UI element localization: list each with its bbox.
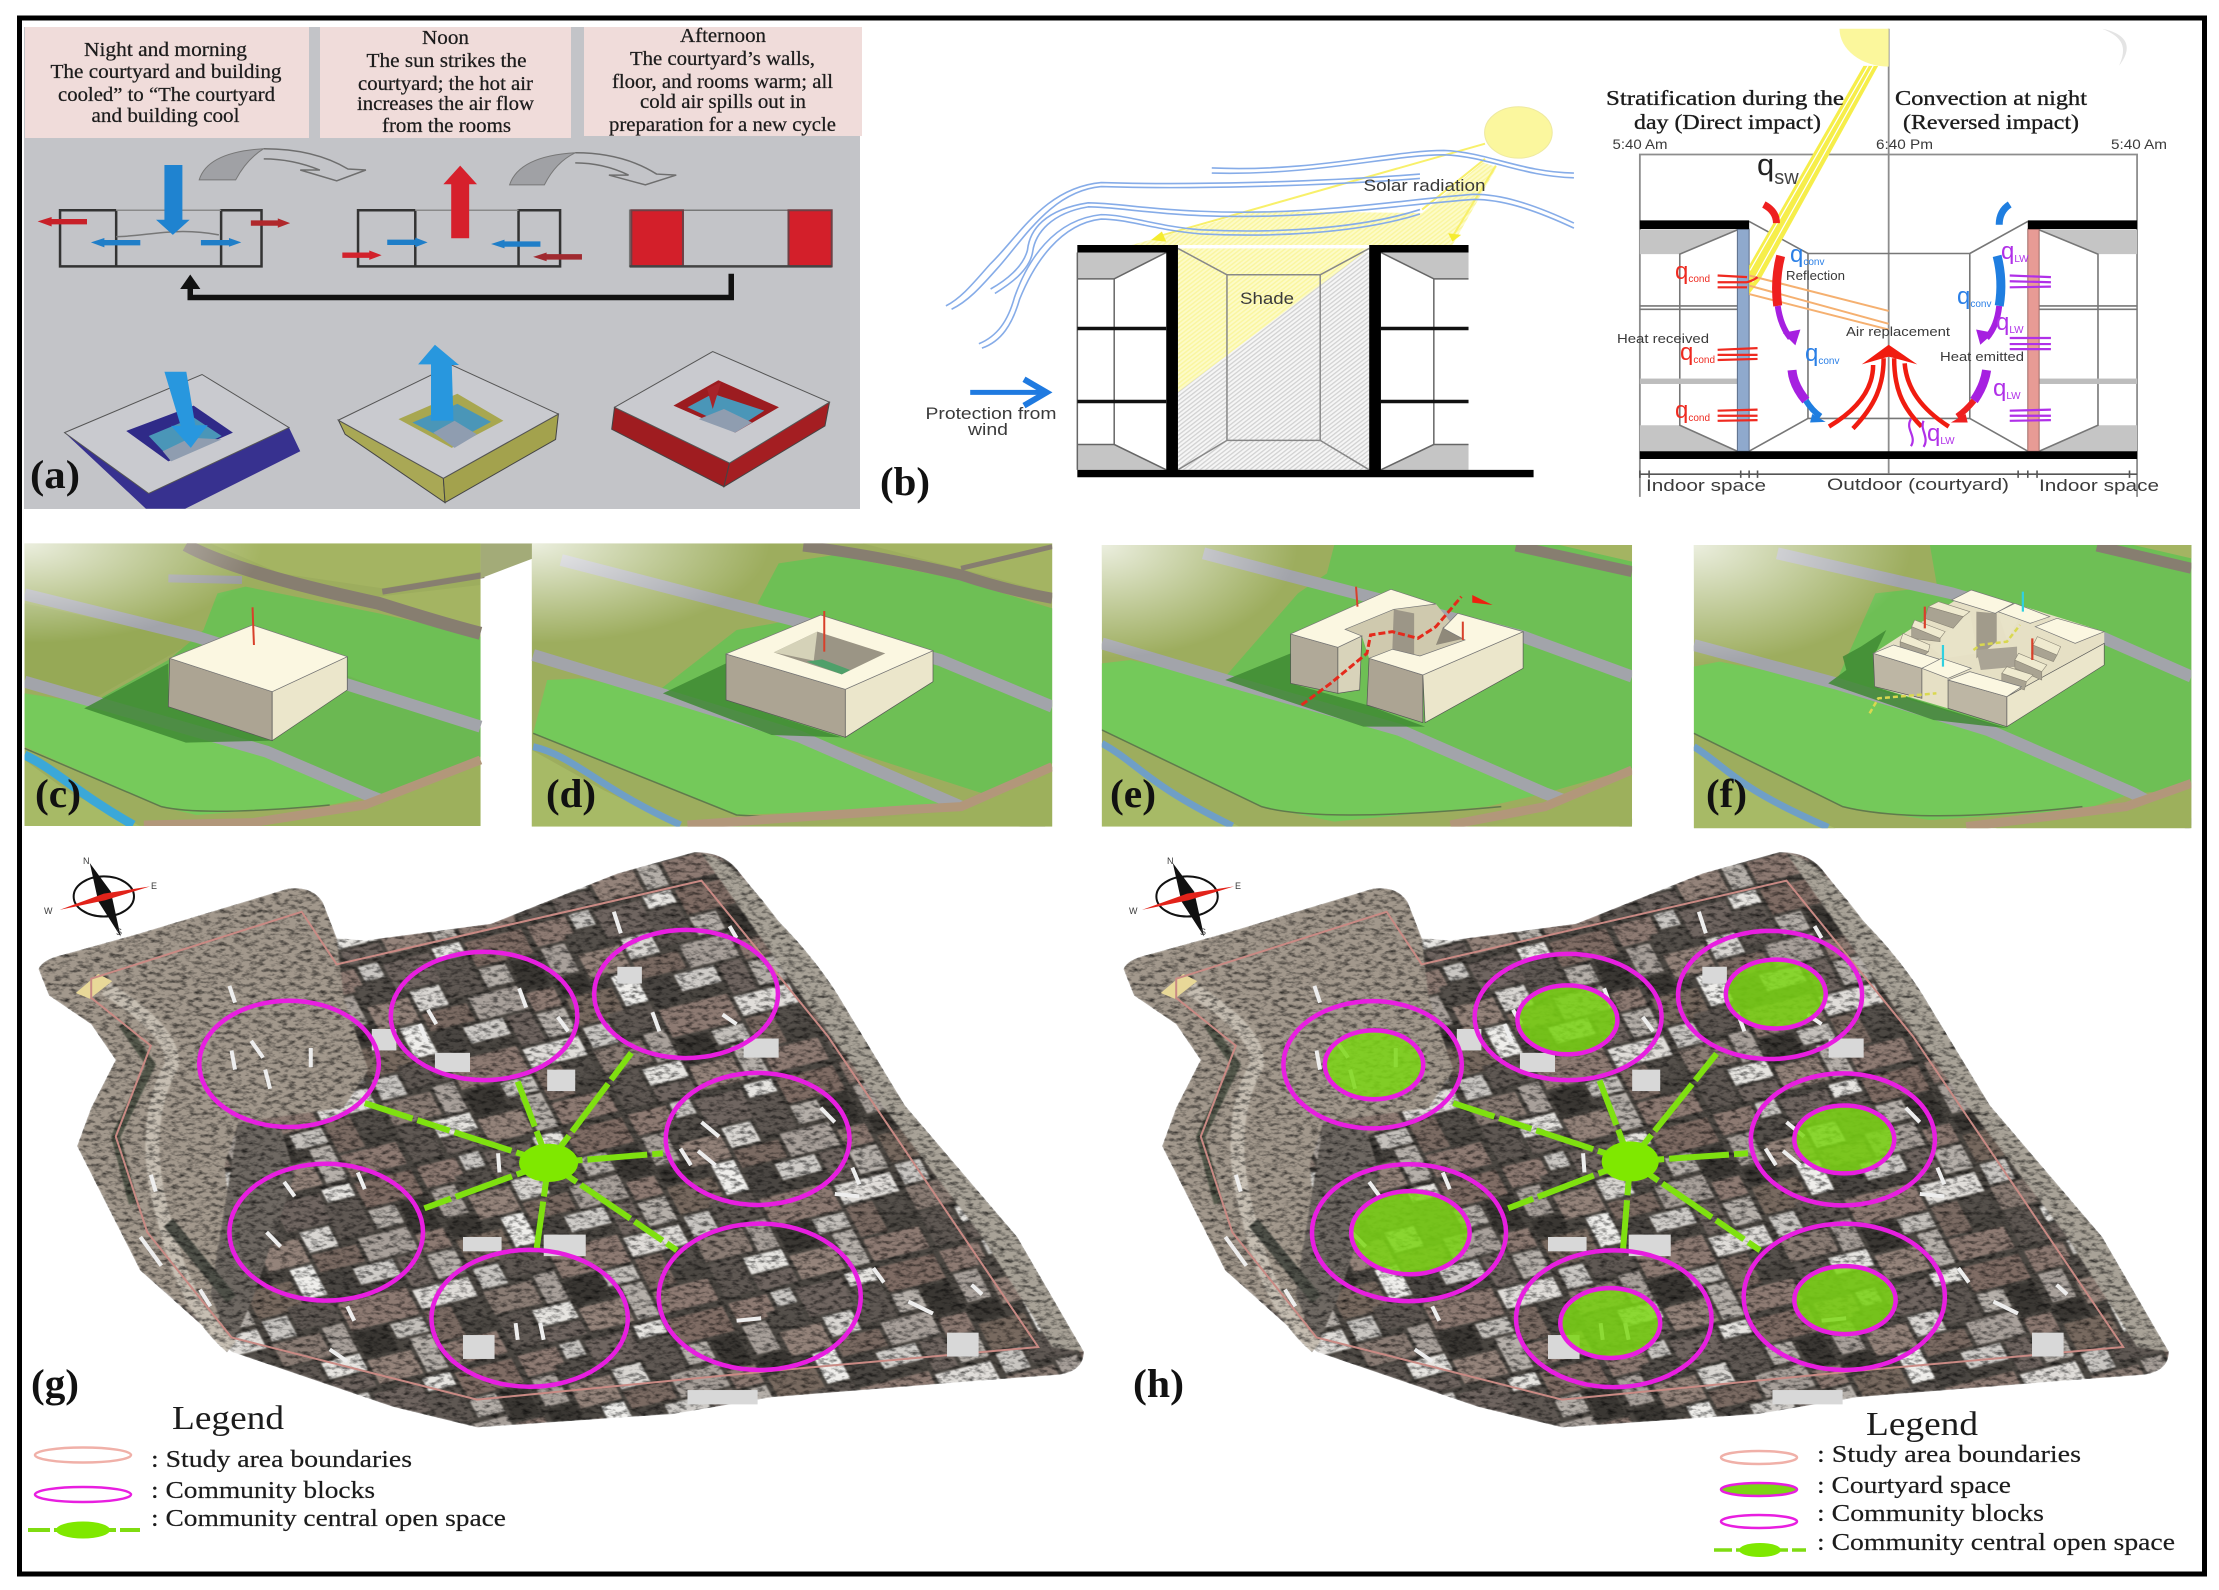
schematic: noon	[342, 166, 582, 266]
icon: compass	[1142, 863, 1234, 937]
block: noon, olive	[338, 345, 558, 503]
text: shade: Shade	[1240, 289, 1294, 308]
label d: (d)	[546, 771, 596, 816]
reflection lines	[1749, 275, 1889, 330]
map g: community blocks	[28, 852, 1084, 1538]
legend h: : Community central open space	[1817, 1530, 2175, 1556]
compass letters	[44, 856, 157, 937]
diagram annotations	[1617, 269, 2024, 364]
red air path	[1302, 587, 1493, 705]
courtyard spaces	[1325, 960, 1896, 1358]
space labels	[1646, 475, 2159, 495]
legend h: : Community blocks	[1817, 1501, 2044, 1527]
solar beam	[1749, 66, 1878, 294]
label h: (h)	[1133, 1361, 1184, 1406]
text: protection from wind: wind	[967, 420, 1008, 439]
compass letters: E	[151, 881, 157, 891]
heading: stratification	[1606, 86, 1844, 134]
compass letters	[1129, 856, 1241, 937]
caption: night and morning: The courtyard and building	[50, 62, 282, 83]
text: protection from wind: Protection from	[926, 404, 1056, 423]
label f: (f)	[1706, 771, 1747, 816]
heading: convection: Convection at night	[1895, 86, 2087, 110]
panel e: open-sided courtyard massing	[1102, 545, 1632, 827]
central open space network	[1453, 1053, 1760, 1250]
flux labels: convection: conv	[1803, 257, 1824, 268]
diagram annotations: Heat received	[1617, 332, 1709, 346]
time labels: 6:40 Pm	[1876, 136, 1933, 152]
caption: afternoon: Afternoon	[680, 26, 766, 47]
heading: convection: (Reversed impact)	[1903, 110, 2079, 134]
arrows: air replacement	[1829, 345, 1949, 429]
label c: (c)	[35, 771, 81, 816]
aerial base map	[1124, 852, 2169, 1427]
panel: stratification and convection diagram	[1606, 29, 2167, 497]
legend h	[1714, 1406, 2175, 1557]
building: stepped block	[1873, 590, 2104, 727]
wind streamlines	[946, 150, 1574, 348]
flux labels: convection: conv	[1818, 356, 1839, 367]
time labels: 5:40 Am	[2111, 136, 2167, 152]
building: U-shaped block	[1291, 589, 1523, 723]
flux labels: long wave: LW	[2009, 325, 2024, 336]
flux labels: conduction: q	[1675, 258, 1688, 285]
flux labels: long wave: q	[1927, 420, 1940, 447]
compass letters: W	[44, 906, 53, 916]
compass letters: N	[83, 856, 90, 866]
diagram annotations: Reflection	[1786, 269, 1845, 283]
flux labels: long wave: LW	[2006, 391, 2021, 402]
text: protection from wind	[926, 404, 1056, 439]
schematic: night and morning	[38, 165, 290, 266]
legend h: Legend	[1866, 1406, 1978, 1443]
flux labels: convection: q	[1957, 283, 1970, 310]
heading: stratification: day (Direct impact)	[1634, 110, 1821, 134]
heat arrows: long wave	[1909, 275, 2051, 447]
icon: sun	[1839, 29, 1889, 67]
courtyard section	[1077, 245, 1534, 477]
caption: noon: from the rooms	[382, 116, 511, 137]
caption: night and morning	[25, 27, 309, 138]
caption: noon	[320, 27, 571, 138]
caption: afternoon: The courtyard’s walls,	[630, 49, 815, 70]
solar rays	[1132, 144, 1497, 245]
flux labels: long wave: LW	[2014, 254, 2029, 265]
return arrow	[180, 274, 731, 297]
stepped terraces	[1900, 602, 2061, 690]
building: courtyard block	[726, 615, 933, 737]
caption: afternoon	[584, 26, 862, 136]
aerial base map	[39, 852, 1084, 1427]
flux labels: convection: q	[1790, 241, 1803, 268]
dimension line	[1640, 470, 2137, 478]
community block rings	[199, 930, 861, 1387]
icon: moon	[2102, 29, 2127, 66]
label a: (a)	[30, 452, 80, 497]
air lines	[1925, 592, 2032, 667]
central open space network	[365, 1053, 677, 1250]
flux labels: convection: q	[1805, 340, 1818, 367]
flux labels: long wave: q	[1993, 375, 2006, 402]
icon: compass	[60, 863, 150, 937]
flow schematics	[38, 149, 832, 509]
red air line	[823, 611, 825, 652]
compass letters: E	[1235, 881, 1241, 891]
caption: noon: courtyard; the hot air	[358, 74, 534, 95]
legend h: : Courtyard space	[1817, 1473, 2011, 1499]
flux label: short wave: q	[1757, 147, 1774, 182]
red air line	[253, 607, 254, 645]
building: solid block	[168, 625, 347, 741]
flux label: short wave: sw	[1774, 167, 1799, 189]
icon: sun	[1485, 107, 1552, 158]
flux labels: long wave: q	[1996, 309, 2009, 336]
map h: community blocks with courtyards	[1124, 852, 2175, 1557]
space labels: Indoor space	[2039, 476, 2159, 495]
flux labels: convection: conv	[1970, 299, 1991, 310]
panel c: solid block massing	[25, 543, 533, 826]
space labels: Outdoor (courtyard)	[1827, 475, 2009, 494]
legend g: : Community blocks	[151, 1478, 375, 1504]
legend g: Legend	[172, 1400, 284, 1437]
flux labels: convection	[1790, 241, 1991, 367]
caption: afternoon: floor, and rooms warm; all	[612, 72, 834, 93]
heading: convection	[1895, 86, 2087, 134]
legend g	[28, 1400, 506, 1538]
flux labels: conduction	[1675, 258, 1715, 424]
heat arrows: conduction	[1718, 275, 1758, 421]
time labels	[1612, 136, 2167, 152]
legend h: : Study area boundaries	[1817, 1442, 2081, 1468]
diagram annotations: Air replacement	[1846, 325, 1951, 339]
diagram annotations: Heat emitted	[1940, 350, 2024, 364]
flux labels: conduction: cond	[1688, 274, 1710, 285]
yellow air paths	[1870, 625, 2020, 713]
shadow	[1225, 653, 1425, 727]
legend g: : Study area boundaries	[151, 1447, 412, 1473]
flux labels: conduction: q	[1675, 397, 1688, 424]
block: night and morning, blue	[65, 372, 300, 509]
block: afternoon, red	[612, 352, 829, 487]
shadow	[663, 663, 842, 737]
caption: noon: The sun strikes the	[366, 51, 526, 72]
flux labels: conduction: cond	[1688, 413, 1710, 424]
heading: stratification: Stratification during the	[1606, 86, 1844, 110]
frame and building section	[1640, 29, 2137, 497]
panel f: stepped courtyard massing	[1694, 545, 2191, 828]
panel a: courtyard daily cycle	[24, 26, 862, 509]
compass letters: N	[1167, 856, 1174, 866]
flux labels: long wave: LW	[1940, 436, 1955, 447]
flux labels: long wave	[1927, 238, 2029, 447]
panel a background	[24, 27, 860, 509]
caption: afternoon: preparation for a new cycle	[609, 115, 836, 136]
community block rings	[1283, 931, 1945, 1387]
caption: night and morning: and building cool	[92, 106, 240, 127]
compass letters: W	[1129, 906, 1138, 916]
legend g: : Community central open space	[151, 1506, 506, 1532]
caption: noon: increases the air flow	[357, 94, 534, 115]
arrow: wind	[970, 379, 1047, 406]
flux labels: conduction: q	[1680, 339, 1693, 366]
caption: afternoon: cold air spills out in	[640, 92, 806, 113]
flux labels: long wave: q	[2001, 238, 2014, 265]
schematic: afternoon	[630, 210, 832, 266]
curved arrow: noon to afternoon	[510, 153, 676, 185]
caption: night and morning: Night and morning	[84, 40, 247, 61]
space labels: Indoor space	[1646, 476, 1766, 495]
caption: night and morning: cooled” to “The courtyard	[58, 85, 275, 106]
curved arrow: morning to noon	[199, 149, 366, 181]
label e: (e)	[1110, 771, 1156, 816]
panel d: courtyard block massing	[532, 543, 1052, 827]
compass letters: S	[116, 927, 122, 937]
caption: noon: Noon	[422, 28, 469, 49]
label g: (g)	[31, 1361, 79, 1406]
time labels: 5:40 Am	[1612, 136, 1668, 152]
panel b: courtyard section, sun and wind	[880, 107, 1574, 504]
shadow	[1828, 630, 2008, 728]
compass letters: S	[1200, 927, 1206, 937]
text: solar radiation: Solar radiation	[1364, 176, 1486, 195]
flux labels: conduction: cond	[1693, 355, 1715, 366]
label b: (b)	[880, 459, 930, 504]
convection arcs	[1764, 204, 2010, 422]
shadow	[84, 663, 272, 743]
